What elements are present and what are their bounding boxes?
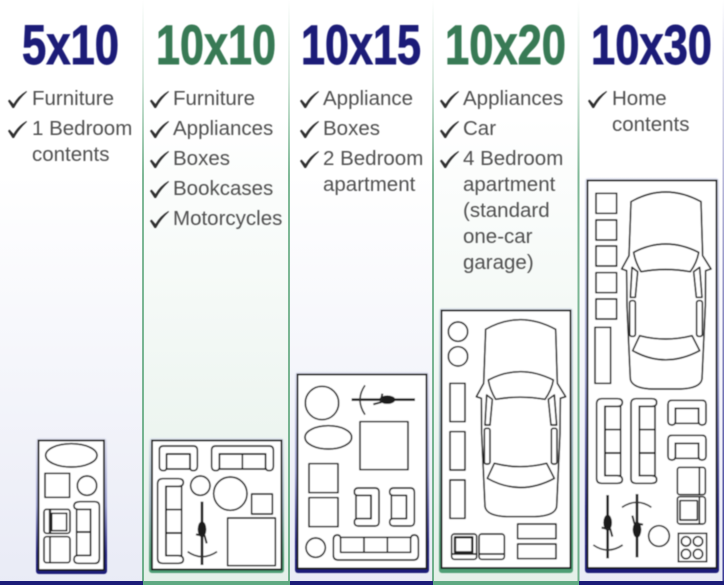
list: 10x20 contents: one-car xyxy=(463,225,533,248)
list: 10x30 contents: Home xyxy=(612,87,667,110)
list: 10x15 contents: Appliance xyxy=(323,87,413,110)
column: 5x10 xyxy=(8,13,132,574)
column: 10x15 xyxy=(295,13,429,573)
floor plan: 10x20 xyxy=(439,308,573,573)
list: 10x20 contents: 4 Bedroom xyxy=(463,147,563,170)
heading: 10x20: 10x20 xyxy=(445,13,566,76)
list: 10x20 contents: Appliances xyxy=(463,87,563,110)
list: 10x10 contents xyxy=(150,87,282,230)
list: 10x20 contents: (standard xyxy=(463,199,550,222)
list: 5x10 contents xyxy=(8,87,132,166)
list: 10x30 contents: contents xyxy=(612,113,690,136)
column: 10x10 xyxy=(149,13,284,573)
column: 10x30 xyxy=(585,13,719,573)
list: 5x10 contents: Furniture xyxy=(32,87,114,110)
floor plan: 10x30 xyxy=(585,178,719,573)
list: 10x15 contents: apartment xyxy=(323,173,416,196)
column: 10x20 xyxy=(439,13,573,573)
list: 10x10 contents: Motorcycles xyxy=(173,207,282,230)
floor plan: 10x10 xyxy=(149,438,284,573)
floor plan: 5x10 xyxy=(36,438,107,574)
list: 10x10 contents: Appliances xyxy=(173,117,273,140)
list: 10x10 contents: Boxes xyxy=(173,147,230,170)
heading: 10x10: 10x10 xyxy=(156,13,276,76)
list: 10x10 contents: Bookcases xyxy=(173,177,273,200)
list: 5x10 contents: contents xyxy=(32,143,110,166)
list: 10x20 contents xyxy=(440,87,563,274)
list: 10x20 contents: Car xyxy=(463,117,496,140)
list: 10x15 contents: Boxes xyxy=(323,117,380,140)
list: 10x15 contents: 2 Bedroom xyxy=(323,147,423,170)
list: 10x30 contents xyxy=(588,87,690,136)
list: 10x20 contents: garage) xyxy=(463,251,534,274)
heading: 5x10: 5x10 xyxy=(22,13,119,76)
floor plan: 10x15 xyxy=(295,372,429,573)
heading: 10x15: 10x15 xyxy=(301,13,421,76)
list: 5x10 contents: 1 Bedroom xyxy=(32,117,132,140)
list: 10x10 contents: Furniture xyxy=(173,87,255,110)
list: 10x15 contents xyxy=(300,87,423,196)
list: 10x20 contents: apartment xyxy=(463,173,556,196)
